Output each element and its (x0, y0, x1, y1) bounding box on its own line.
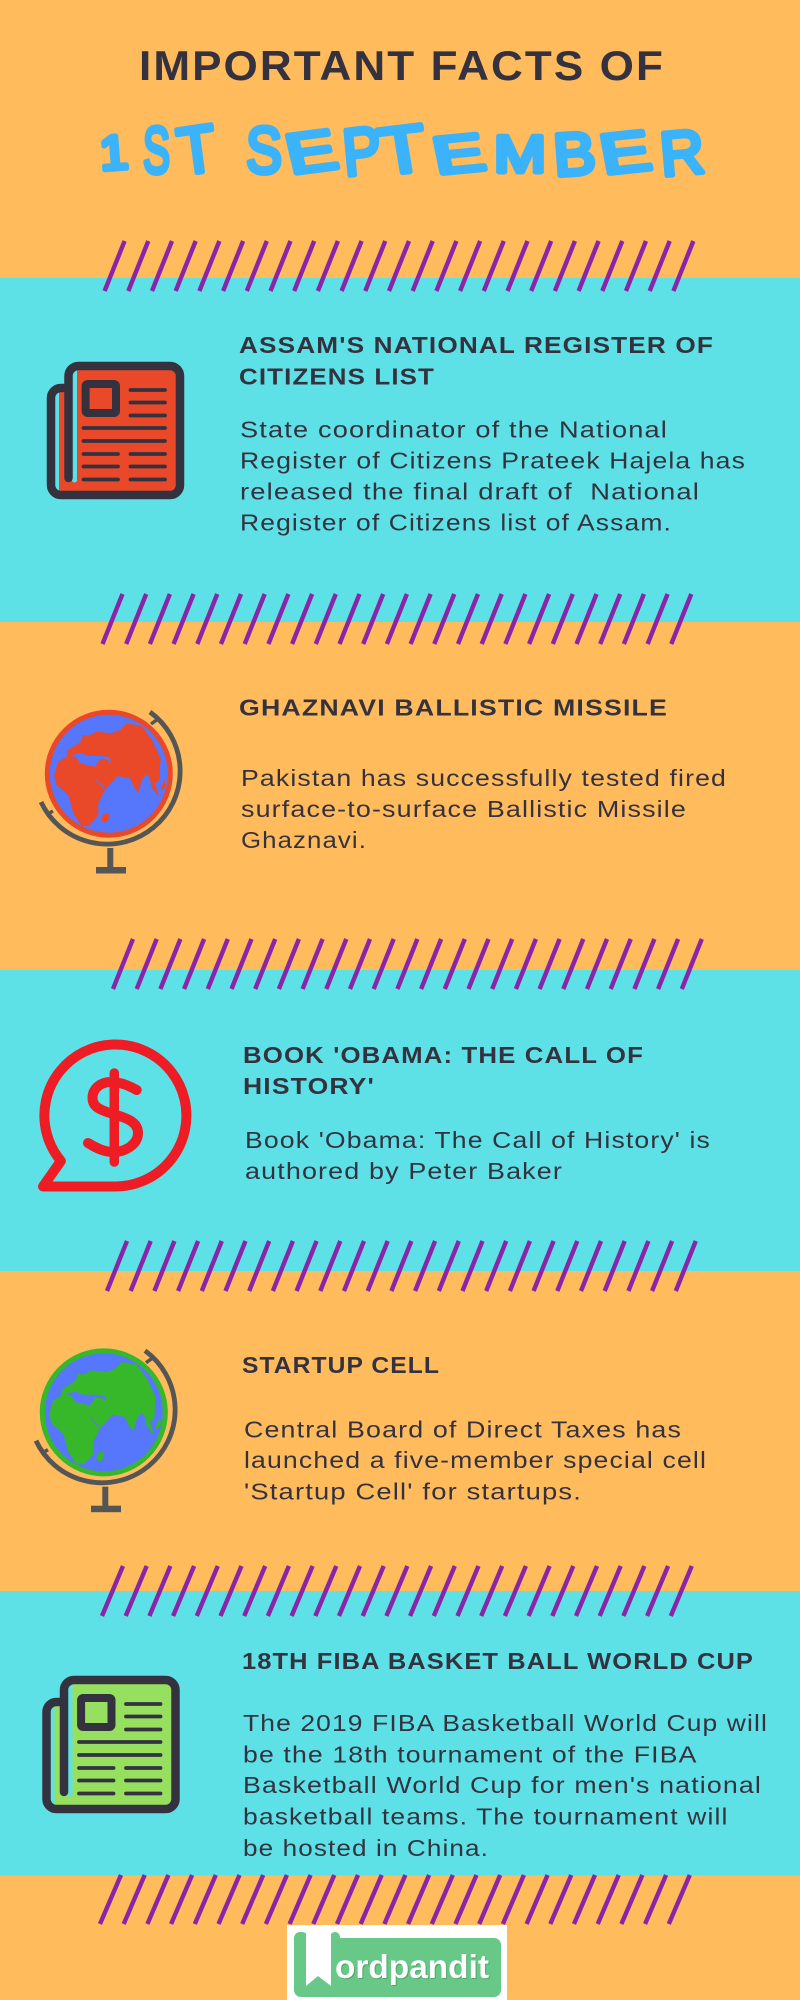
panel: assam's national register of citizens list (51, 332, 746, 536)
title: 1st september: P (339, 112, 384, 190)
heading: CITIZENS LIST (239, 364, 435, 390)
text block: Central Board of Direct Taxes has (244, 1416, 682, 1442)
text block: launched a five-member special cell (244, 1447, 707, 1473)
text block: Pakistan has successfully tested fired (241, 765, 727, 791)
logo: wordpandit (287, 1925, 507, 2000)
panel: ghaznavi ballistic missile (41, 694, 727, 874)
text block (241, 765, 727, 853)
heading: STARTUP CELL (242, 1352, 440, 1378)
title: 1st september: B (551, 119, 598, 189)
icon: red newspaper (51, 366, 180, 495)
title: important facts of: IMPORTANT FACTS OF (139, 42, 665, 89)
panel: 18th fiba basket ball world cup (46, 1648, 768, 1861)
heading: GHAZNAVI BALLISTIC MISSILE (239, 694, 668, 720)
heading: 18TH FIBA BASKET BALL WORLD CUP (242, 1648, 754, 1674)
text block: basketball teams. The tournament will (243, 1804, 728, 1830)
text block: be hosted in China. (243, 1835, 489, 1861)
title: 1st september: T (173, 110, 221, 189)
panel: startup cell (36, 1351, 707, 1512)
heading (243, 1042, 644, 1099)
text block: Register of Citizens list of Assam. (240, 510, 672, 536)
text block: The 2019 FIBA Basketball World Cup will (243, 1710, 768, 1736)
title: 1st september: E (597, 117, 655, 186)
title: 1st september: S (143, 113, 170, 187)
text block (245, 1127, 711, 1184)
icon: green globe (36, 1351, 175, 1512)
icon: green newspaper (46, 1680, 176, 1809)
text block (243, 1710, 768, 1861)
title: 1st september: E (282, 115, 342, 186)
text block: 'Startup Cell' for startups. (244, 1478, 582, 1504)
text block: Register of Citizens Prateek Hajela has (240, 448, 746, 474)
text block (240, 416, 746, 536)
text block (244, 1416, 707, 1504)
title: 1st september: T (375, 109, 431, 189)
text block: surface-to-surface Ballistic Missile (241, 796, 687, 822)
title: 1st september: E (431, 121, 489, 186)
text block: Ghaznavi. (241, 827, 367, 853)
text block: Book 'Obama: The Call of History' is (245, 1127, 711, 1153)
panel: book obama the call of history (43, 1042, 711, 1186)
icon: dollar speech bubble (43, 1044, 186, 1186)
heading: BOOK 'OBAMA: THE CALL OF (243, 1042, 644, 1068)
text block: Basketball World Cup for men's national (243, 1772, 762, 1798)
title: 1st september: S (246, 113, 282, 187)
logo: wordpandit: ordpandit (335, 1948, 489, 1985)
heading: ASSAM'S NATIONAL REGISTER OF (239, 332, 714, 358)
title: 1st september: R (657, 117, 707, 190)
title: 1st september: 1 (98, 126, 130, 181)
icon: red globe (41, 712, 180, 874)
heading (239, 332, 714, 390)
title: 1st september: M (494, 126, 546, 184)
text block: authored by Peter Baker (245, 1158, 563, 1184)
heading: HISTORY' (243, 1073, 375, 1099)
text block: released the final draft of National (240, 478, 700, 504)
text block: State coordinator of the National (240, 416, 668, 442)
text block: be the 18th tournament of the FIBA (243, 1742, 698, 1768)
